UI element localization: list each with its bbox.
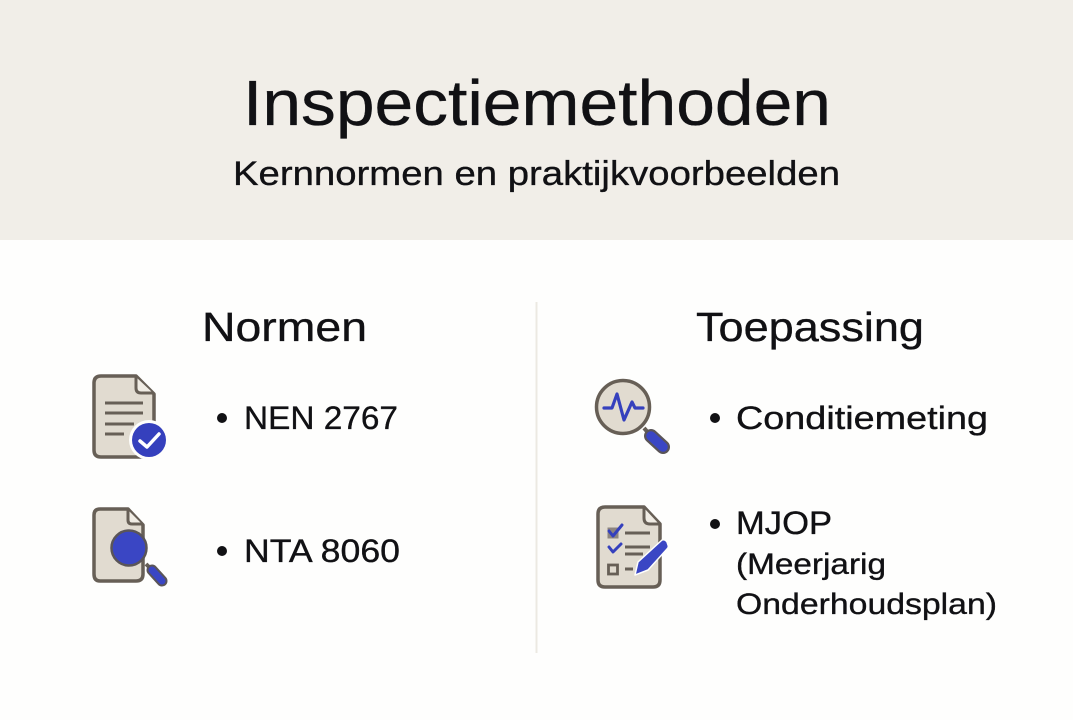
bullet: Conditiemeting: Conditiemeting: [736, 400, 988, 436]
icon: magnifier with pulse: [596, 380, 663, 447]
header band: [0, 0, 1073, 240]
bullet: NTA 8060: NTA 8060: [244, 533, 400, 569]
icon: document with magnifier: [94, 509, 162, 581]
heading: Normen: Normen: [202, 304, 367, 350]
bullet: MJOP (Meerjarig Onderhoudsplan): [710, 505, 997, 621]
subtitle: Kernnormen en praktijkvoorbeelden: [233, 155, 840, 193]
bullet: MJOP (Meerjarig Onderhoudsplan): Onderhoudsplan): [736, 588, 997, 621]
bullet: NEN 2767: NEN 2767: [244, 400, 398, 436]
panel: Toepassing: [596, 304, 997, 621]
title: Inspectiemethoden: [243, 67, 831, 139]
bullet: MJOP (Meerjarig Onderhoudsplan): MJOP: [736, 505, 832, 541]
heading: Toepassing: Toepassing: [696, 304, 924, 350]
icon: document with check badge: [94, 376, 169, 460]
icon: checklist with pen: [598, 507, 668, 587]
panel: Normen: [94, 304, 400, 581]
bullet: MJOP (Meerjarig Onderhoudsplan): (Meerjarig: [736, 548, 886, 581]
